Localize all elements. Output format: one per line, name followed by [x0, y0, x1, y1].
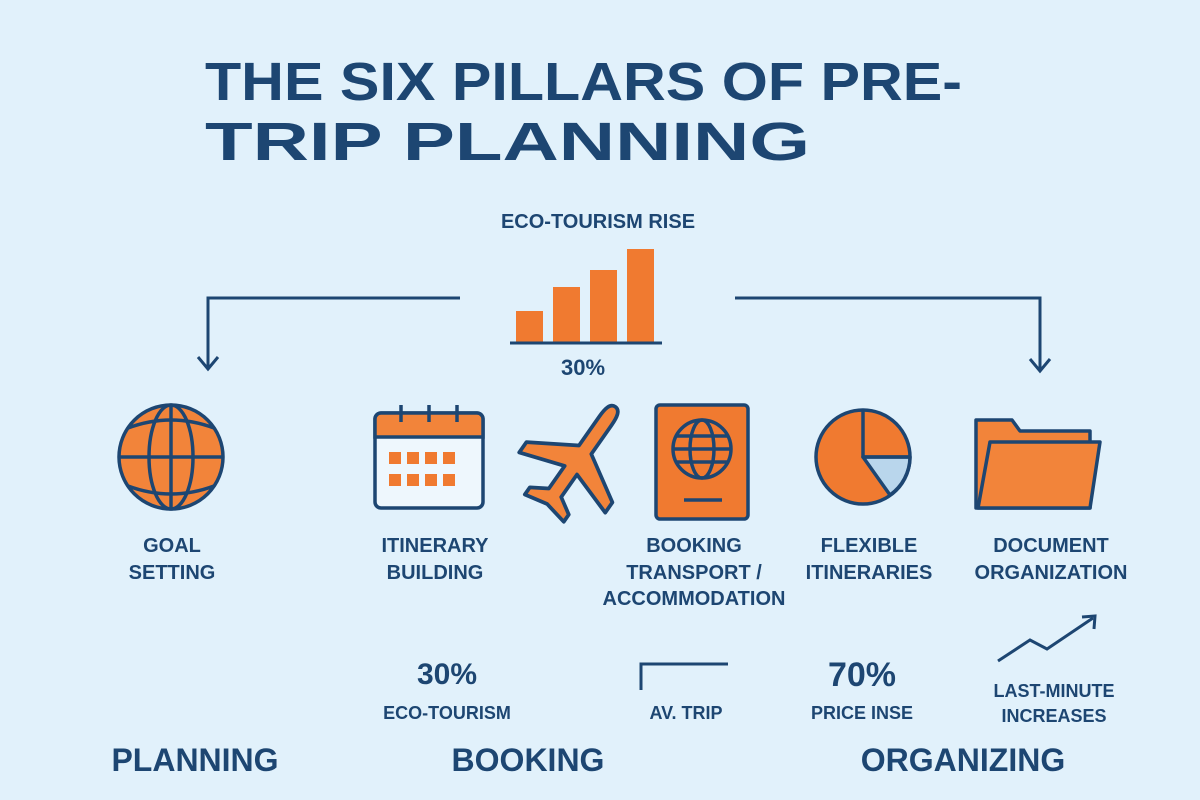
icon: calendar [375, 405, 483, 508]
title: THE SIX PILLARS OF PRE- [205, 52, 962, 112]
section labels [111, 742, 1065, 778]
icon: pie chart [816, 410, 910, 504]
labels: pillars: FLEXIBLE [821, 535, 917, 557]
stat: av. trip: AV. TRIP [649, 703, 723, 723]
stat: av. trip [641, 664, 728, 723]
labels: pillars: SETTING [129, 562, 215, 584]
chart value: 30% [561, 355, 605, 380]
labels: pillars [129, 535, 1127, 610]
chart heading: ECO-TOURISM RISE [501, 211, 695, 233]
labels: pillars: BOOKING [646, 535, 742, 557]
icon: folder [976, 420, 1100, 508]
stat: 30% eco-tourism: ECO-TOURISM [383, 703, 511, 723]
labels: pillars: TRANSPORT / [626, 562, 762, 584]
title: TRIP PLANNING [205, 112, 810, 172]
stat: last-minute increases [994, 616, 1114, 726]
stat: last-minute increases: INCREASES [1001, 706, 1107, 726]
labels: pillars: ORGANIZATION [975, 562, 1127, 584]
arrow: right [735, 298, 1050, 371]
labels: pillars: GOAL [143, 535, 201, 557]
labels: pillars: BUILDING [387, 562, 483, 584]
labels: pillars: ITINERARY [381, 535, 489, 557]
arrow: left [198, 298, 460, 369]
stat: 70% price [811, 656, 913, 723]
labels: pillars: ACCOMMODATION [603, 588, 785, 610]
bar chart [510, 249, 662, 343]
labels: pillars: ITINERARIES [806, 562, 932, 584]
icon: globe [119, 405, 223, 509]
section labels: PLANNING [111, 742, 279, 778]
title [205, 52, 962, 172]
icon: passport [656, 405, 748, 519]
stat: 30% eco-tourism [383, 658, 511, 723]
stat: 70% price: 70% [828, 656, 896, 694]
stat: 30% eco-tourism: 30% [417, 658, 477, 691]
section labels: BOOKING [452, 742, 604, 778]
icon: plane [501, 377, 658, 538]
labels: pillars: DOCUMENT [993, 535, 1109, 557]
section labels: ORGANIZING [861, 742, 1065, 778]
stat: last-minute increases: LAST-MINUTE [994, 681, 1114, 701]
stat: 70% price: PRICE INSE [811, 703, 913, 723]
